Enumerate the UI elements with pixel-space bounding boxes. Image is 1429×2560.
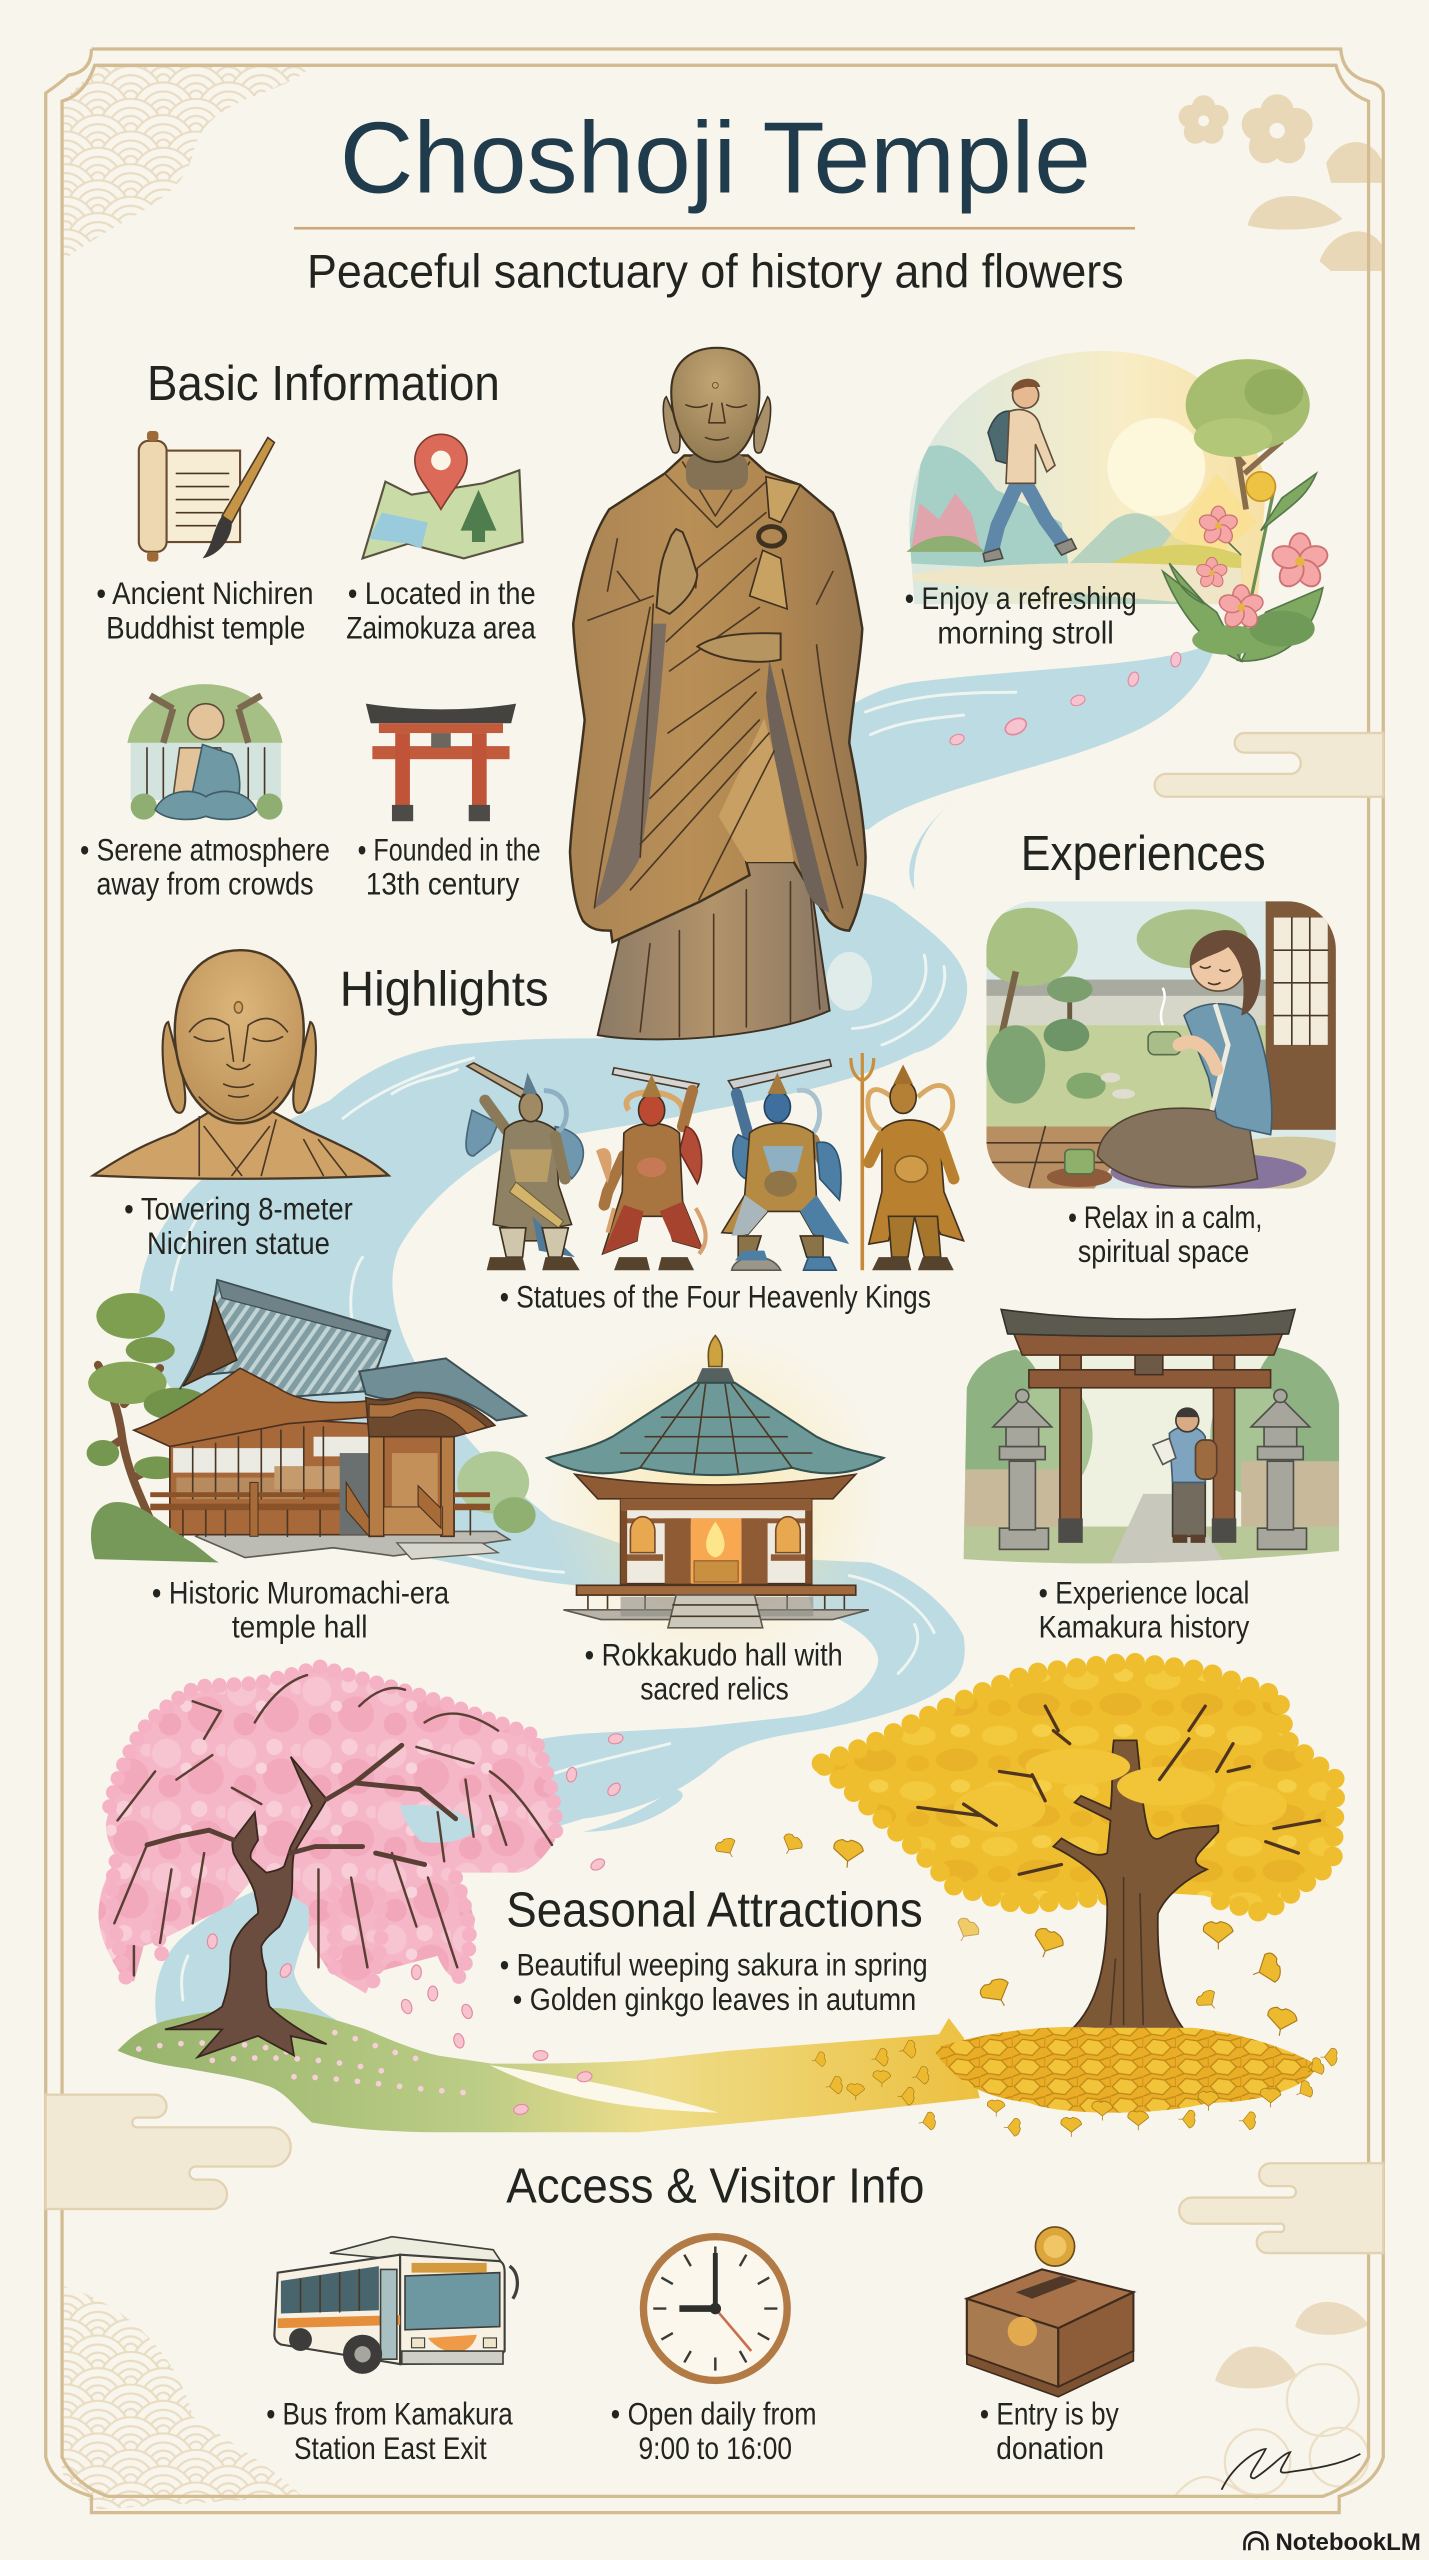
text: seasonal list: • Golden ginkgo leaves in autumn: [513, 1982, 916, 2017]
fallen ginkgo leaf pile: [933, 2027, 1318, 2113]
icon: bus: [274, 2237, 517, 2374]
text: relax: • Relax in a calm,: [1068, 1200, 1262, 1235]
river pale pool: [826, 952, 872, 1011]
cloud motif lower right: [1179, 2163, 1383, 2253]
text: historic hall: temple hall: [232, 1610, 367, 1645]
title: Choshoji Temple: [340, 102, 1091, 215]
text: towering statue: Nichiren statue: [147, 1226, 330, 1261]
king 4: [851, 1053, 964, 1270]
text: donation: • Entry is by: [980, 2396, 1119, 2431]
text: rokkakudo: sacred relics: [640, 1672, 789, 1707]
icon: torii gate: [366, 704, 516, 821]
text: rokkakudo: [585, 1637, 843, 1707]
river highlights: [171, 692, 1016, 2000]
raised hand: [657, 529, 697, 614]
text: hours: • Open daily from: [611, 2396, 817, 2431]
right sleeve shadow: [766, 660, 830, 913]
text: seasonal list: [500, 1948, 928, 2017]
king 3: [722, 1060, 849, 1270]
illustration: Four Heavenly Kings: [466, 1053, 964, 1270]
ground path from spring to autumn: [118, 2008, 980, 2132]
falling petals: [207, 1857, 607, 2115]
bushes: [91, 1502, 219, 1562]
text: towering statue: [124, 1192, 353, 1261]
right bush: [457, 1451, 529, 1513]
illustration: Rokkakudo hexagonal hall: [544, 1331, 887, 1673]
main roof: [180, 1280, 390, 1398]
icon: clock: [643, 2237, 787, 2380]
cloud motif lower left: [46, 2095, 291, 2209]
front panel light: [719, 718, 794, 862]
river small swirl: [583, 1789, 683, 1832]
central Nichiren statue: [570, 348, 866, 1039]
heading: Highlights: Highlights: [340, 963, 549, 1017]
sash: [766, 477, 800, 522]
text: ancient temple: • Ancient Nichiren: [96, 576, 314, 611]
text: hours: [611, 2396, 817, 2466]
text: founded: [358, 832, 541, 902]
icon: donation box: [967, 2227, 1133, 2397]
illustration: Muromachi temple hall: [87, 1280, 536, 1562]
foreground foliage clusters: [954, 1749, 1287, 1832]
stone lantern right: [1251, 1389, 1310, 1549]
text: bus: Station East Exit: [294, 2431, 487, 2466]
visitor with backpack: [1153, 1407, 1217, 1543]
text: ancient temple: Buddhist temple: [106, 610, 305, 645]
text: local history: [1039, 1575, 1250, 1645]
trunk: [1050, 1740, 1218, 2054]
text: local history: • Experience local: [1039, 1575, 1249, 1610]
text: donation: [980, 2396, 1119, 2466]
lower eaves: [134, 1368, 369, 1447]
text: local history: Kamakura history: [1039, 1610, 1250, 1645]
falling ginkgo leaves: [714, 1832, 1299, 2038]
king 1: [466, 1063, 583, 1270]
text: founded: 13th century: [366, 867, 520, 902]
stone lantern left: [993, 1389, 1052, 1549]
walker: [983, 379, 1076, 562]
fallen blossoms on ground: [139, 2033, 474, 2093]
text: serene atmosphere: [80, 832, 330, 902]
text: location: • Located in the: [348, 576, 536, 611]
front gable: [359, 1358, 526, 1420]
text: founded: • Founded in the: [358, 832, 541, 867]
scattered fallen leaves: [810, 2040, 1337, 2137]
heading: Experiences: Experiences: [1021, 827, 1266, 881]
subtitle: Peaceful sanctuary of history and flowers: [307, 245, 1124, 298]
text: donation: donation: [996, 2431, 1104, 2466]
text: ancient temple: [96, 576, 314, 645]
stone base: [196, 1531, 510, 1558]
river gap inside the canopy: [400, 1805, 477, 1843]
illustration: morning stroll scene: [906, 351, 1330, 661]
text: relax: spiritual space: [1078, 1234, 1249, 1269]
king 2: [596, 1068, 706, 1270]
text: four kings: • Statues of the Four Heavenly Kings: [500, 1280, 931, 1315]
text: relax: [1068, 1200, 1262, 1269]
bouquet: [1163, 472, 1330, 661]
path highlight: [490, 2065, 719, 2113]
illustration: Nichiren head bust: [93, 950, 389, 1179]
decorative blossoms bottom right: [1176, 2302, 1369, 2498]
cloud motif upper right: [1155, 733, 1383, 797]
decorative plum blossoms and pine top right: [1179, 94, 1382, 271]
heading: Seasonal Attractions: Seasonal Attractions: [506, 1884, 923, 1938]
icon: meditating monk: [127, 684, 283, 820]
icon: map pin: [363, 434, 523, 558]
building walls: [170, 1417, 454, 1535]
text: historic hall: [152, 1575, 450, 1645]
decorative seigaiha pattern bottom left: [62, 2286, 302, 2509]
title rule: [294, 227, 1135, 230]
text: seasonal list: • Beautiful weeping sakura in spring: [500, 1948, 928, 1983]
text: stroll: morning stroll: [937, 615, 1114, 650]
illustration: woman relaxing with tea: [980, 901, 1336, 1192]
illustration: weeping sakura tree: [98, 1667, 607, 2115]
decorative seigaiha pattern top left: [62, 67, 310, 261]
text: rokkakudo: • Rokkakudo hall with: [585, 1637, 843, 1672]
river arc: [909, 800, 955, 890]
heading: Basic Information: Basic Information: [147, 357, 500, 411]
left sleeve shadow: [594, 624, 666, 908]
text: stroll: • Enjoy a refreshing: [905, 581, 1137, 616]
text: location: [346, 576, 536, 645]
illustration: torii gate scene with visitor: [959, 1309, 1347, 1567]
artist signature: [1222, 2449, 1360, 2490]
river: [139, 640, 1217, 2023]
illustration: golden ginkgo tree: [714, 1662, 1337, 2137]
lower hand: [697, 633, 781, 662]
heading: Access & Visitor Info: Access & Visitor Info: [506, 2159, 924, 2213]
text: location: Zaimokuza area: [346, 610, 536, 645]
icon: scroll and brush: [139, 431, 274, 562]
text: bus: • Bus from Kamakura: [266, 2396, 513, 2431]
NotebookLM logo mark: NotebookLM: [1275, 2529, 1421, 2556]
text: towering statue: • Towering 8-meter: [124, 1192, 353, 1227]
text: historic hall: • Historic Muromachi-era: [152, 1575, 450, 1610]
text: hours: 9:00 to 16:00: [639, 2431, 792, 2466]
pink petals on river: [534, 652, 1182, 1798]
text: serene atmosphere: away from crowds: [96, 867, 314, 902]
text: bus: [266, 2396, 513, 2466]
text: stroll: [905, 581, 1137, 650]
text: serene atmosphere: • Serene atmosphere: [80, 832, 330, 867]
veranda rail and posts: [150, 1492, 340, 1497]
trunk and limbs: [165, 1757, 327, 2057]
pine tree: [87, 1293, 209, 1527]
